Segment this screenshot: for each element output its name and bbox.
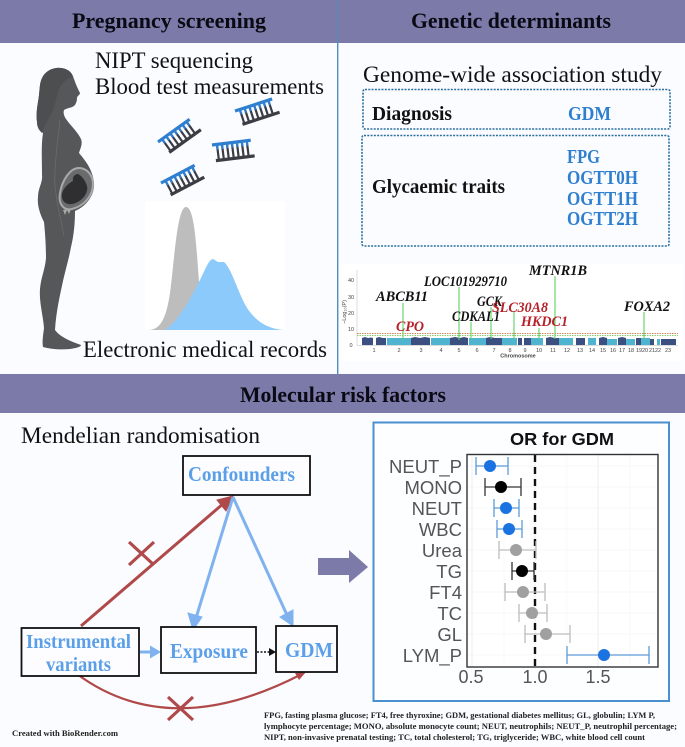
row: Urea: Urea <box>422 540 463 561</box>
axis labels: 12 <box>564 348 570 354</box>
row: NEUT_P <box>389 456 508 478</box>
axis labels: 5 <box>457 348 461 354</box>
box: glycaemic traits: FPG <box>567 147 600 168</box>
box: glycaemic traits: Glycaemic traits <box>372 177 505 198</box>
row: GL: GL <box>437 624 462 645</box>
gene labels: GCK <box>477 294 503 310</box>
text: abbreviations footnote: NIPT, non-invasive prenatal testing; TC, total cholesterol; TG, triglyceride; WBC, white blood cell count <box>264 732 645 742</box>
arrow: instrumental variants to GDM (blocked) <box>77 672 306 720</box>
icon: fetus in womb <box>60 168 93 215</box>
box: GDM <box>276 626 337 672</box>
axis labels: 30 <box>348 295 354 301</box>
x axis labels: 1.0 <box>522 667 548 687</box>
axis labels: 4 <box>439 348 443 354</box>
heading: genetic determinants: Genetic determinants <box>411 8 611 33</box>
axis labels: 7 <box>492 348 496 354</box>
heading: molecular risk factors: Molecular risk factors <box>240 382 446 407</box>
axis labels: 22 <box>655 348 661 354</box>
chart: overlapping distributions <box>145 201 285 330</box>
diagram: Mendelian randomisation <box>22 456 337 720</box>
gene labels: CDKAL1 <box>452 309 500 325</box>
chart title: OR for GDM <box>510 429 614 449</box>
icon: pregnant woman silhouette <box>37 68 94 349</box>
axis labels: 16 <box>610 348 616 354</box>
row: NEUT_P: NEUT_P <box>389 456 462 478</box>
gene labels: LOC101929710 <box>423 274 507 290</box>
x axis labels: 0.5 <box>458 667 484 687</box>
axis labels: 13 <box>577 348 583 354</box>
axis labels: Chromosome <box>500 354 536 360</box>
axis labels: 20 <box>348 311 354 317</box>
gene labels <box>375 263 670 335</box>
x axis labels <box>458 667 611 687</box>
row: NEUT: NEUT <box>412 498 462 519</box>
axis labels: 3 <box>419 348 423 354</box>
axis labels: 21 <box>649 348 655 354</box>
heading: pregnancy screening: Pregnancy screening <box>72 8 267 33</box>
axis labels: 18 <box>628 348 634 354</box>
arrow: instrumental variants to confounders (blocked) <box>81 496 233 626</box>
text: blood test measurements: Blood test measurements <box>95 74 324 99</box>
row: FT4: FT4 <box>429 582 462 603</box>
axis labels: 14 <box>589 348 595 354</box>
box: glycaemic traits <box>362 136 669 246</box>
heading: molecular risk factors <box>0 374 685 413</box>
axis labels: 1 <box>372 348 376 354</box>
axis labels: 10 <box>348 327 354 333</box>
row: FT4 <box>429 582 545 603</box>
box: exposure <box>161 627 256 673</box>
gene labels: ABCB11 <box>375 289 428 305</box>
gene labels: SLC30A8 <box>492 300 548 316</box>
icon: DNA fragment 3 <box>212 140 255 161</box>
box: glycaemic traits: OGTT1H <box>567 189 638 210</box>
text: abbreviations footnote: FPG, fasting plasma glucose; FT4, free thyroxine; GDM, gestational diabetes mellitus; GL, globulin; LYM P, <box>264 710 655 720</box>
axis labels: −Log₁₀(P) <box>342 300 348 324</box>
axis labels: 11 <box>550 348 556 354</box>
text: genome-wide association study: Genome-wide association study <box>363 62 663 87</box>
row: TG <box>436 561 534 582</box>
divider between top panels <box>337 0 338 374</box>
axis labels: 15 <box>600 348 606 354</box>
panel: pregnancy screening <box>0 0 337 362</box>
row: NEUT <box>412 498 519 519</box>
panel: genetic determinants <box>338 0 685 361</box>
axis labels: 2 <box>397 348 401 354</box>
box: glycaemic traits: OGTT0H <box>567 168 638 189</box>
box: instrumental variants <box>22 628 139 676</box>
text: abbreviations footnote <box>264 710 677 742</box>
significant peaks <box>403 276 644 340</box>
box: glycaemic traits: OGTT2H <box>567 209 638 230</box>
axis labels: 9 <box>523 348 527 354</box>
row: TG: TG <box>436 561 462 582</box>
axis labels: 8 <box>508 348 512 354</box>
arrow: instrumental variants to exposure <box>140 646 161 658</box>
box: diagnosis <box>363 90 670 129</box>
text: BioRender credit: Created with BioRender.com <box>12 728 118 738</box>
axis labels: 40 <box>348 278 354 284</box>
panel: molecular risk factors <box>0 374 685 742</box>
icon: DNA fragment 1 <box>158 117 201 154</box>
axis labels: 23 <box>665 348 671 354</box>
box: confounders <box>183 456 310 495</box>
axis labels: 10 <box>536 348 542 354</box>
box: instrumental variants: variants <box>46 654 111 676</box>
row: MONO <box>404 477 521 498</box>
axis labels: 20 <box>642 348 648 354</box>
box: confounders: Confounders <box>188 462 295 486</box>
box: GDM: GDM <box>285 638 333 662</box>
row: WBC: WBC <box>419 519 462 540</box>
text: Mendelian randomisation: Mendelian randomisation <box>21 423 260 448</box>
row: TC: TC <box>437 603 462 624</box>
icon: DNA fragment 2 <box>235 98 280 125</box>
row: LYM_P <box>403 645 649 667</box>
x axis labels: 1.5 <box>585 667 611 687</box>
row: TC <box>437 603 547 624</box>
arrow: exposure to GDM (dotted) <box>257 648 276 656</box>
heading: genetic determinants <box>338 0 685 43</box>
row: WBC <box>419 519 522 540</box>
text: NIPT sequencing: NIPT sequencing <box>95 48 253 73</box>
plot frame and grid <box>467 454 658 667</box>
arrow: confounders to GDM <box>233 497 293 626</box>
axis labels: 19 <box>636 348 642 354</box>
box: exposure: Exposure <box>170 639 248 663</box>
row: GL <box>437 624 570 645</box>
chart: Manhattan plot <box>342 263 683 361</box>
gene labels: MTNR1B <box>528 263 587 279</box>
gene labels: FOXA2 <box>623 299 670 315</box>
gene labels: CPO <box>396 319 424 335</box>
text: electronic medical records: Electronic medical records <box>83 337 327 362</box>
arrow: diagram to forest plot <box>318 550 368 583</box>
row: LYM_P: LYM_P <box>403 645 462 667</box>
row: Urea <box>422 540 536 561</box>
axis labels <box>342 278 671 360</box>
axis labels: 0 <box>349 343 353 349</box>
row: MONO: MONO <box>404 477 462 498</box>
axis labels: 17 <box>619 348 625 354</box>
chromosome bars <box>362 337 676 345</box>
box: diagnosis: Diagnosis <box>372 104 452 125</box>
arrow: confounders to exposure <box>188 497 233 630</box>
text: abbreviations footnote: lymphocyte percentage; MONO, absolute monocyte count; NEUT, neutrophils; NEUT_P, neutrophil percentage; <box>264 721 677 731</box>
axis labels: 6 <box>475 348 479 354</box>
heading: pregnancy screening <box>0 0 337 43</box>
gene labels: HKDC1 <box>520 314 568 330</box>
box: instrumental variants: Instrumental <box>26 631 131 653</box>
chart: forest plot OR for GDM <box>374 422 669 701</box>
box: diagnosis: GDM <box>568 104 611 125</box>
icon: DNA fragment 4 <box>161 164 204 196</box>
